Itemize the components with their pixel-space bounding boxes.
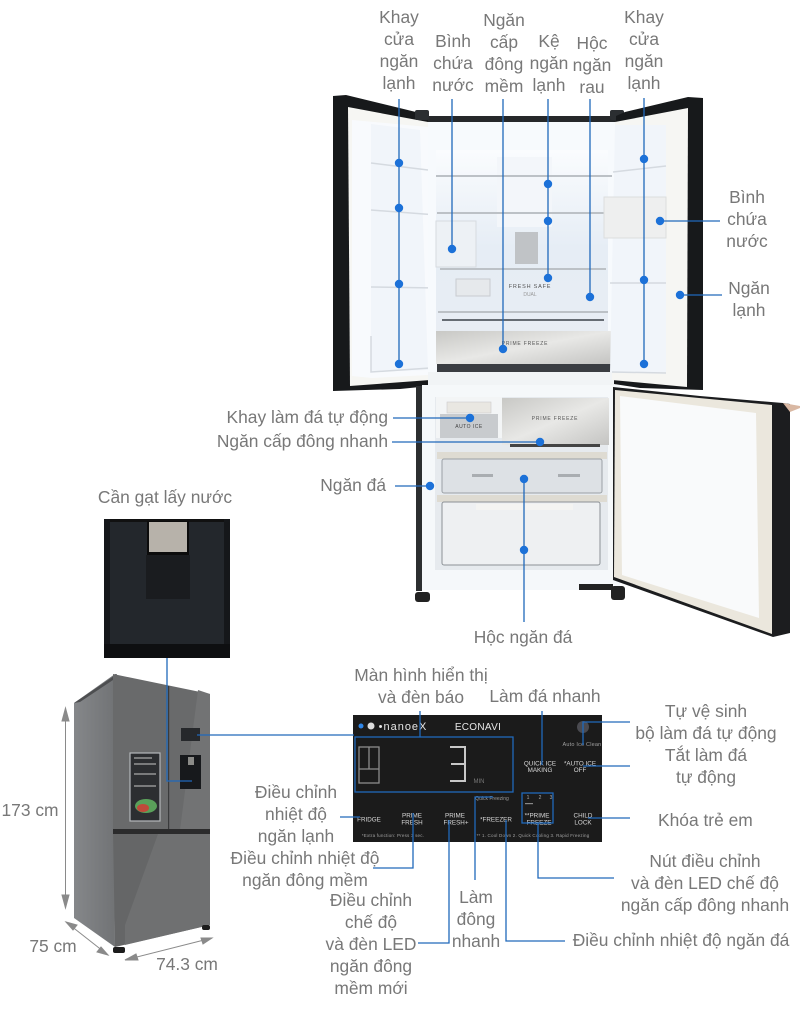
central compartment: DUAL: [523, 292, 537, 298]
prime freeze drawer: PRIME FREEZE: [532, 416, 578, 422]
info sticker: [130, 753, 160, 821]
callout dots: [395, 155, 684, 554]
control panel: *FREEZER: [480, 816, 512, 824]
label: water tank: Bình: [435, 31, 471, 51]
label: rapid freeze compartment: Ngăn cấp đông nhanh: [217, 431, 388, 451]
prime freeze drawer: [502, 398, 609, 447]
label: auto ice off: Tắt làm đá: [665, 745, 747, 765]
label: self clean: bộ làm đá tự động: [635, 723, 777, 743]
control panel: OFF: [574, 767, 586, 774]
label: freezer drawer: Hộc ngăn đá: [474, 627, 573, 647]
freezer body: [415, 385, 625, 602]
control panel: 3: [550, 795, 553, 801]
freezer drawers: [437, 452, 607, 565]
dimension: width: 74.3 cm: [156, 954, 218, 974]
label: fridge shelf: lạnh: [533, 75, 565, 95]
label: right door tray: lạnh: [628, 73, 660, 93]
door display: [181, 728, 200, 741]
label: freezer temperature: Điều chỉnh nhiệt độ ngăn đá: [573, 930, 790, 950]
label: fridge shelf: Kệ: [538, 31, 560, 51]
leader lines: [167, 98, 722, 943]
control panel: Auto Ice Clean: [563, 742, 601, 748]
control panel: CHILD: [574, 812, 593, 820]
control panel: [353, 715, 602, 842]
control panel: **PRIME: [525, 812, 549, 820]
label: fridge compartment: Ngăn: [728, 278, 770, 298]
refrigerator upper compartment open: [333, 95, 703, 391]
buttons: QUICK ICE: [524, 760, 556, 768]
label: soft freeze compartment: cấp: [490, 32, 518, 52]
control panel: FRESH: [401, 820, 423, 826]
label: new soft freeze mode: Điều chỉnh: [330, 890, 412, 910]
fridge icon: [359, 747, 379, 783]
dimension: height: 173 cm: [1, 800, 59, 820]
label: right door tray: cửa: [629, 29, 659, 49]
label: soft freeze compartment: đông: [485, 54, 523, 74]
control panel: MIN: [474, 779, 484, 785]
digit display: [450, 747, 465, 781]
control panel: *AUTO ICE: [564, 760, 596, 768]
control panel: MAKING: [528, 767, 553, 774]
water dispenser close-up: [104, 519, 230, 658]
control panel: FREEZE: [527, 820, 551, 826]
label: auto ice tray: Khay làm đá tự động: [226, 407, 388, 427]
label: prime freeze button: và đèn LED chế độ: [631, 873, 779, 893]
label: water lever: Cần gạt lấy nước: [98, 487, 232, 507]
label: freezer compartment: Ngăn đá: [320, 475, 386, 495]
label: right water tank: Bình: [729, 187, 765, 207]
label: right water tank: chứa: [727, 209, 767, 229]
label: prime freeze button: Nút điều chỉnh: [649, 851, 761, 871]
central compartment: FRESH SAFE: [509, 284, 551, 290]
label: quick ice: Làm đá nhanh: [489, 686, 601, 706]
label: vegetable drawer: ngăn: [573, 55, 611, 75]
control panel: PRIME: [445, 812, 465, 820]
control panel: FRESH+: [443, 820, 469, 826]
water tank inner: [436, 221, 476, 267]
control panel: 2: [539, 795, 542, 801]
label: fridge temperature: Điều chỉnh: [255, 782, 337, 802]
right door: [604, 97, 703, 390]
label: quick freezing: Làm: [459, 887, 493, 907]
label: fridge compartment: lạnh: [733, 300, 765, 320]
control panel: ** 1. Cool Down 2. Quick Cooling 3. Rapid Freezing: [477, 833, 590, 838]
full fridge product image: [74, 674, 210, 953]
label: vegetable drawer: rau: [579, 77, 605, 97]
label: new soft freeze mode: và đèn LED: [326, 934, 416, 954]
label: self clean: Tự vệ sinh: [665, 701, 747, 721]
label: quick freezing: nhanh: [452, 931, 500, 951]
label: left door tray: ngăn: [380, 51, 418, 71]
label: soft freeze compartment: mềm: [485, 76, 523, 96]
control panel: FRIDGE: [357, 816, 381, 824]
refrigerator lower compartment open: [415, 385, 800, 637]
label: display screen: và đèn báo: [378, 687, 464, 707]
freezer door: [613, 387, 800, 637]
control panel: 1: [527, 795, 530, 801]
label: new soft freeze mode: mềm mới: [334, 978, 408, 998]
label: soft freeze temperature: Điều chỉnh nhiệt độ: [231, 848, 379, 868]
label: left door tray: Khay: [379, 7, 419, 27]
label: fridge temperature: ngăn lạnh: [258, 826, 334, 846]
control panel: Quick Freezing: [475, 796, 509, 802]
control panel: PRIME: [402, 812, 422, 820]
label: right water tank: nước: [726, 231, 768, 251]
central compartment: PRIME FREEZE: [502, 341, 548, 347]
door dispenser: [180, 755, 201, 789]
label: quick freezing: đông: [457, 909, 495, 929]
dimension: depth: 75 cm: [29, 936, 77, 956]
label: fridge shelf: ngăn: [530, 53, 568, 73]
control panel: ECONAVI: [455, 722, 501, 733]
label: display screen: Màn hình hiển thị: [354, 665, 488, 685]
label: new soft freeze mode: chế độ: [345, 912, 397, 932]
label: new soft freeze mode: ngăn đông: [330, 956, 412, 976]
label: soft freeze temperature: ngăn đông mềm: [242, 870, 368, 890]
label: vegetable drawer: Hộc: [577, 33, 608, 53]
label: left door tray: cửa: [384, 29, 414, 49]
control panel: LOCK: [574, 820, 592, 826]
label: right door tray: Khay: [624, 7, 664, 27]
central compartment: [415, 110, 624, 388]
label: soft freeze compartment: Ngăn: [483, 10, 525, 30]
label: water tank: nước: [432, 75, 474, 95]
auto ice tray: AUTO ICE: [455, 424, 483, 430]
label: fridge temperature: nhiệt độ: [265, 804, 327, 824]
label: water tank: chứa: [433, 53, 473, 73]
label: prime freeze button: ngăn cấp đông nhanh: [621, 895, 789, 915]
label: left door tray: lạnh: [383, 73, 415, 93]
brand logos: •nanoeX: [379, 721, 427, 733]
left door: [333, 95, 437, 391]
label: auto ice off: tự động: [676, 767, 736, 787]
label: child lock: Khóa trẻ em: [658, 810, 753, 830]
control panel: *Extra function: Press 3 sec.: [362, 833, 424, 838]
auto ice tray: [436, 397, 502, 438]
dimension arrows: [62, 708, 212, 960]
label: right door tray: ngăn: [625, 51, 663, 71]
